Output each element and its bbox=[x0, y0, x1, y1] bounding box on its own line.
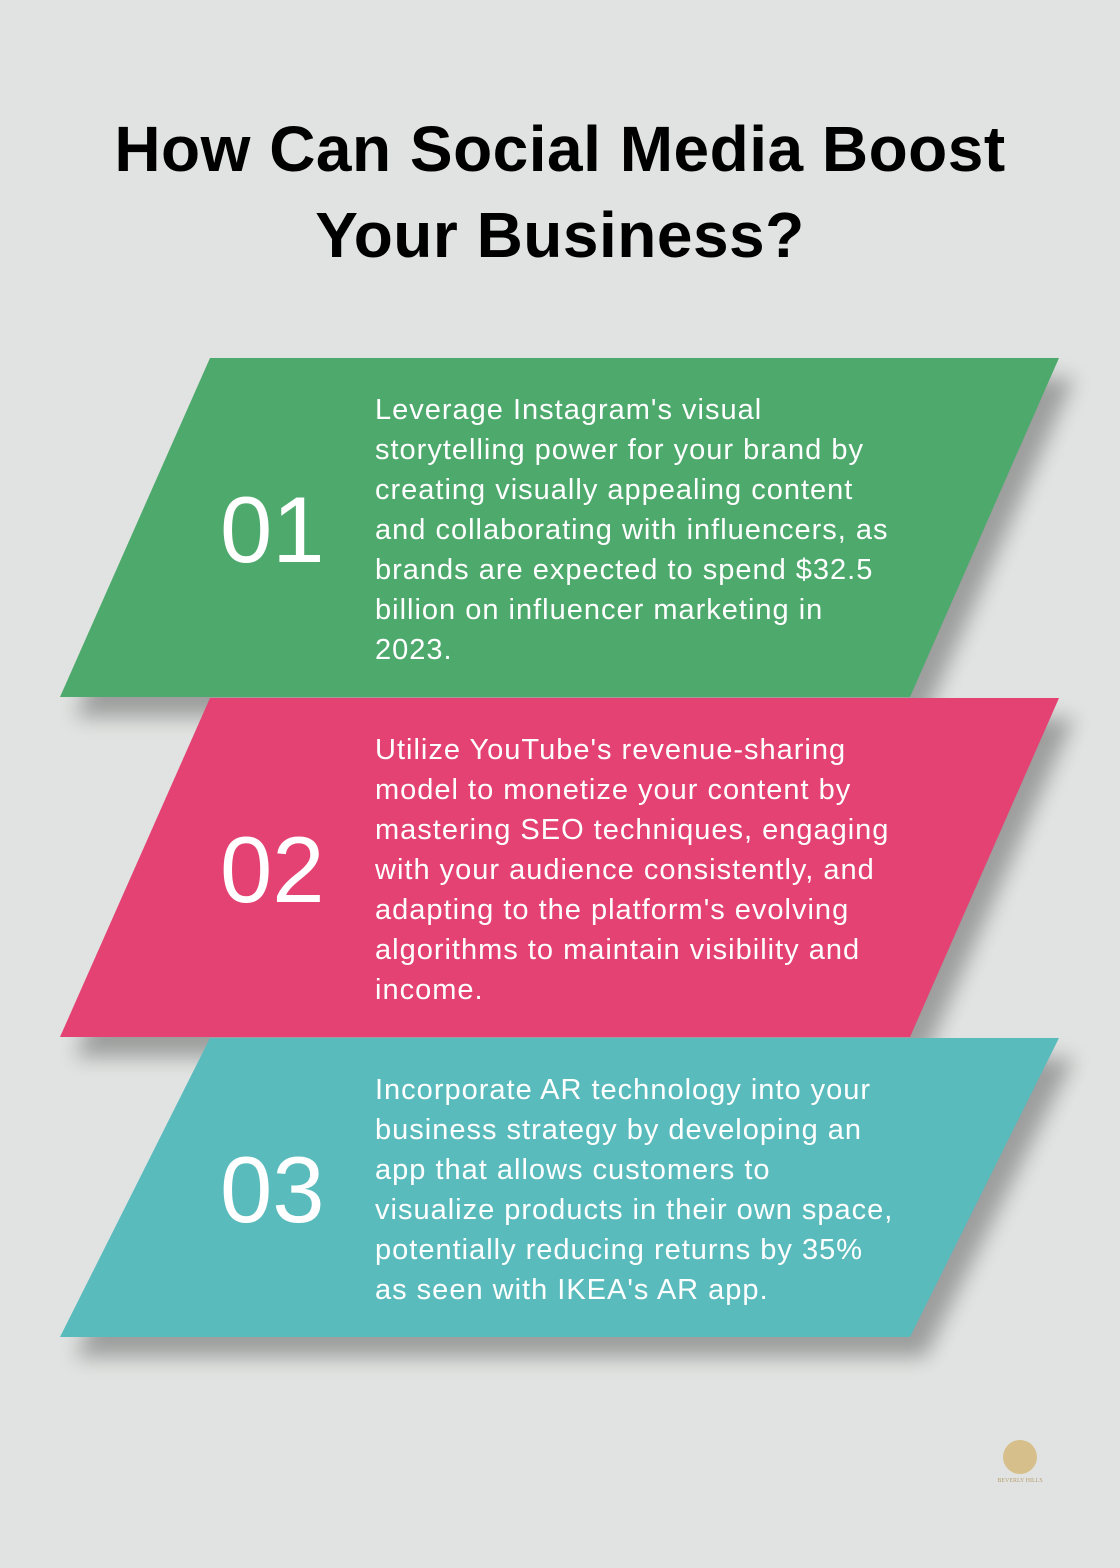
text 03: app that allows customers to bbox=[375, 1154, 771, 1186]
text 02: income. bbox=[375, 974, 484, 1006]
number 01: 01 bbox=[220, 477, 325, 582]
number 03: 03 bbox=[220, 1137, 325, 1242]
logo: BEVERLY HILLS bbox=[997, 1478, 1043, 1484]
title: How Can Social Media Boost bbox=[114, 113, 1006, 185]
text 02: mastering SEO techniques, engaging bbox=[375, 814, 889, 846]
text 03 bbox=[375, 1074, 893, 1306]
text 03: business strategy by developing an bbox=[375, 1114, 862, 1146]
text 03: Incorporate AR technology into your bbox=[375, 1074, 871, 1106]
title bbox=[114, 113, 1006, 271]
text 01: Leverage Instagram's visual bbox=[375, 394, 762, 426]
text 01: 2023. bbox=[375, 634, 453, 666]
text 01: and collaborating with influencers, as bbox=[375, 514, 889, 546]
text 01 bbox=[375, 394, 889, 666]
text 01: billion on influencer marketing in bbox=[375, 594, 823, 626]
text 03: as seen with IKEA's AR app. bbox=[375, 1274, 769, 1306]
number 02: 02 bbox=[220, 817, 325, 922]
text 01: brands are expected to spend $32.5 bbox=[375, 554, 873, 586]
text 02: adapting to the platform's evolving bbox=[375, 894, 849, 926]
title: Your Business? bbox=[315, 199, 805, 271]
logo bbox=[997, 1440, 1043, 1484]
text 02: Utilize YouTube's revenue-sharing bbox=[375, 734, 846, 766]
text 03: visualize products in their own space, bbox=[375, 1194, 893, 1226]
text 01: storytelling power for your brand by bbox=[375, 434, 864, 466]
text 02: with your audience consistently, and bbox=[375, 854, 875, 886]
text 01: creating visually appealing content bbox=[375, 474, 853, 506]
panel: 02 bbox=[220, 734, 889, 1006]
panel: 01 bbox=[220, 394, 889, 666]
text 02: model to monetize your content by bbox=[375, 774, 851, 806]
panel: 03 bbox=[220, 1074, 893, 1306]
text 02: algorithms to maintain visibility and bbox=[375, 934, 860, 966]
text 03: potentially reducing returns by 35% bbox=[375, 1234, 863, 1266]
text 02 bbox=[375, 734, 889, 1006]
